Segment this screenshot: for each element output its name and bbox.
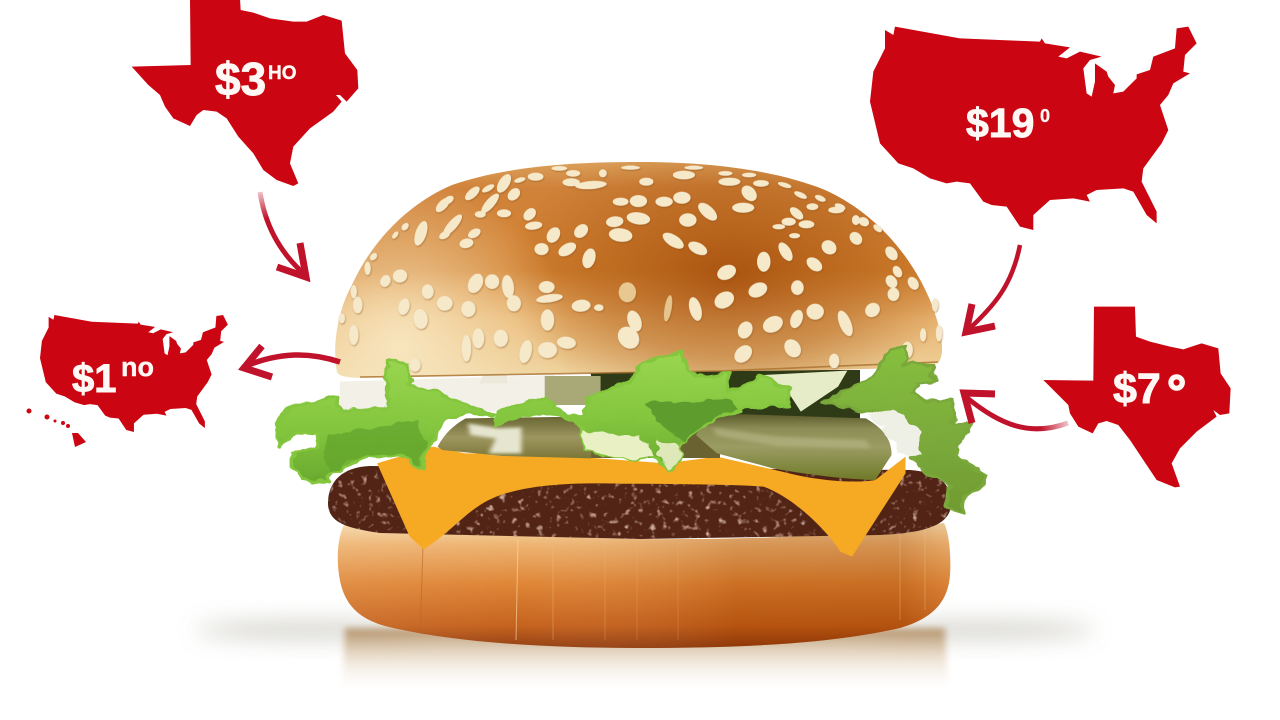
price label: no <box>121 352 154 382</box>
right pickle <box>696 414 892 480</box>
map: USA, top right <box>870 27 1197 230</box>
arrow: burger to USA left <box>244 346 340 377</box>
bun reflection <box>342 628 948 690</box>
shadow between pickles <box>580 425 720 458</box>
left pickle <box>438 417 591 458</box>
map: Texas, top left <box>132 0 358 186</box>
center lettuce leaf <box>493 352 791 472</box>
lettuce <box>277 347 987 513</box>
beef patty <box>328 466 952 540</box>
right lettuce leaf <box>824 347 987 513</box>
burger <box>277 162 987 648</box>
dark gap under bun <box>590 370 860 432</box>
price label: $1 <box>72 357 116 401</box>
price label: $19 <box>966 100 1034 146</box>
arrow: Texas top left to burger <box>260 192 306 277</box>
arrow: Texas right to burger <box>964 393 1068 429</box>
top bun <box>335 162 942 378</box>
onion layer <box>340 357 847 412</box>
price label: ° <box>1167 367 1186 420</box>
pickles <box>438 414 892 480</box>
sesame seeds <box>339 166 942 372</box>
left lettuce leaf <box>277 358 493 483</box>
price label: $7 <box>1113 365 1161 413</box>
price label: HO <box>268 63 296 84</box>
map: Texas, right <box>1043 307 1231 487</box>
arrow: USA top right to burger <box>966 245 1020 332</box>
map: USA with Hawaii, left <box>26 315 228 447</box>
Hawaii islands <box>26 408 86 447</box>
cheese slice <box>377 447 906 557</box>
price label: 0 <box>1040 106 1050 126</box>
bottom bun <box>338 523 950 648</box>
price label: $3 <box>215 53 266 105</box>
ground shadow <box>195 620 1095 640</box>
